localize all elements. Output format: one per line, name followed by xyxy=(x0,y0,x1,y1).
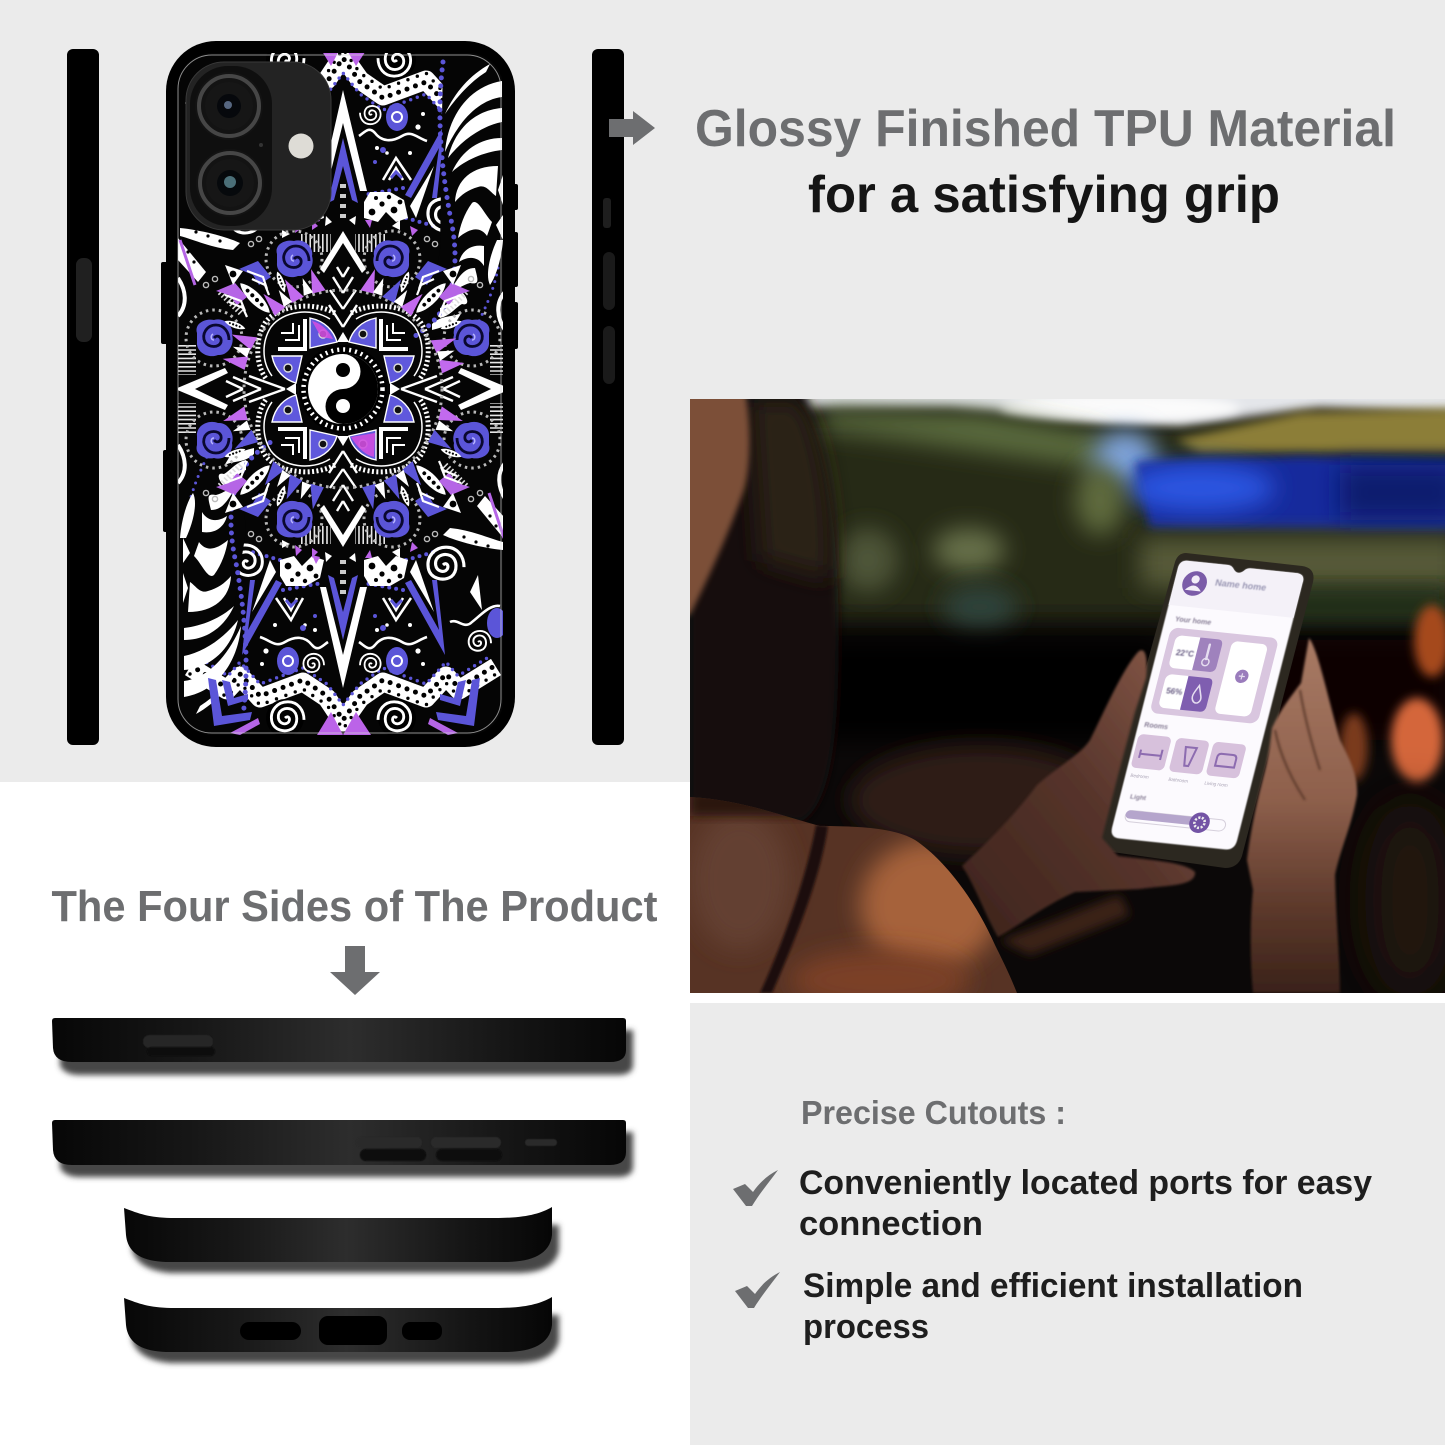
heading: glossy finished TPU material: for a satisfying grip xyxy=(808,166,1280,224)
lifestyle photo: woman holding phone xyxy=(680,380,1445,1010)
side view strip: top edge xyxy=(124,1207,559,1273)
hair xyxy=(690,399,839,822)
wavy lines xyxy=(260,637,328,648)
climate card: 56% xyxy=(1165,687,1184,697)
icon: check mark two xyxy=(735,1272,780,1308)
flash xyxy=(288,134,314,158)
right side view of the case xyxy=(592,49,624,745)
purple eyes xyxy=(277,647,299,675)
large zebra swirl bottom left xyxy=(183,448,254,714)
icon: check mark one xyxy=(733,1170,778,1206)
phone screen with app UI xyxy=(1110,560,1305,850)
climate card xyxy=(1149,627,1279,724)
phone device xyxy=(1100,553,1314,868)
side view strip: volume side xyxy=(52,1018,633,1075)
room tiles xyxy=(1128,734,1247,789)
side view strip: bottom edge with ports xyxy=(124,1297,559,1363)
left side view of the case xyxy=(67,49,99,745)
white dotted lace band xyxy=(190,667,496,722)
small pink triangles chain xyxy=(295,542,418,564)
right hand xyxy=(1247,638,1357,993)
side pods xyxy=(470,575,482,610)
heading: glossy finished TPU material: Glossy Finished TPU Material xyxy=(695,100,1396,158)
ring of pink and purple spikes xyxy=(221,267,465,511)
small white diamonds on ring xyxy=(286,332,400,446)
black backing behind zebra swirls xyxy=(226,78,501,572)
subheading: precise cutouts: Precise Cutouts : xyxy=(801,1094,1066,1131)
mandala artwork xyxy=(175,41,511,737)
white dotted mini spikes xyxy=(231,276,456,501)
dark dress strap xyxy=(760,825,828,993)
bullet text: ports: connection xyxy=(799,1205,983,1243)
shoulder and arm xyxy=(690,790,1030,1010)
lower right swirl and eye xyxy=(450,606,507,651)
purple side spikes xyxy=(242,580,282,655)
heading: the four sides of the product: The Four Sides of The Product xyxy=(52,882,658,931)
room tiles: Living room xyxy=(1204,780,1228,788)
upper half ornaments mirrored xyxy=(185,53,442,238)
mid swirl on side xyxy=(428,547,464,579)
scattered dots xyxy=(260,623,425,666)
app header text: Name home xyxy=(1214,578,1268,593)
blurred background scenery xyxy=(780,380,1445,1000)
pink base wedges xyxy=(317,712,371,735)
bottom corner purple chevrons xyxy=(208,678,480,735)
bullet text: installation: Simple and efficient installation xyxy=(803,1267,1303,1305)
big white swirls on black xyxy=(273,699,284,704)
beaded middle ring xyxy=(244,290,442,488)
phone frame xyxy=(1100,553,1314,868)
arrow: down to side views xyxy=(330,946,380,995)
large zebra swirl top right xyxy=(432,64,503,330)
white dotted triangles xyxy=(252,560,276,612)
lower dim arm xyxy=(1000,895,1130,955)
phone case back with mandala artwork xyxy=(161,41,518,747)
camera module xyxy=(186,62,331,230)
upper lens xyxy=(195,72,263,140)
four symmetric quadrants xyxy=(175,231,511,547)
small v marks xyxy=(276,598,411,620)
side view strip: button side xyxy=(52,1120,633,1177)
lower half ornaments xyxy=(190,540,496,737)
rooms label: Rooms xyxy=(1143,720,1169,731)
edge pods xyxy=(178,228,505,550)
small swirls xyxy=(303,654,324,672)
lower lens xyxy=(196,149,264,217)
arrow: right pointing to heading xyxy=(609,111,655,145)
light label: Light xyxy=(1129,794,1148,802)
case body xyxy=(166,41,515,747)
room tiles: Bathroom xyxy=(1168,777,1189,784)
your home label: Your home xyxy=(1174,614,1212,627)
pink petal accents xyxy=(312,321,375,457)
heading: glossy finished TPU material xyxy=(695,100,1396,224)
purple bead chains along zebra xyxy=(412,62,498,342)
glossy edge highlight xyxy=(178,55,501,733)
left hand xyxy=(962,650,1195,937)
side buttons xyxy=(161,184,518,532)
beaded purple chains xyxy=(195,655,492,705)
light slider xyxy=(1123,805,1228,836)
avatar xyxy=(1179,570,1210,597)
central mandala xyxy=(175,231,511,547)
central white spike with purple core xyxy=(320,587,367,688)
yin yang symbol xyxy=(299,345,387,433)
crowns xyxy=(280,556,324,586)
bullet text: installation: process xyxy=(803,1308,929,1346)
bullet text: ports: Conveniently located ports for easy xyxy=(799,1164,1372,1202)
face xyxy=(690,399,753,618)
port cutouts xyxy=(240,1316,442,1345)
room tiles: Bedroom xyxy=(1130,773,1149,780)
climate card: 22°C xyxy=(1175,648,1195,659)
